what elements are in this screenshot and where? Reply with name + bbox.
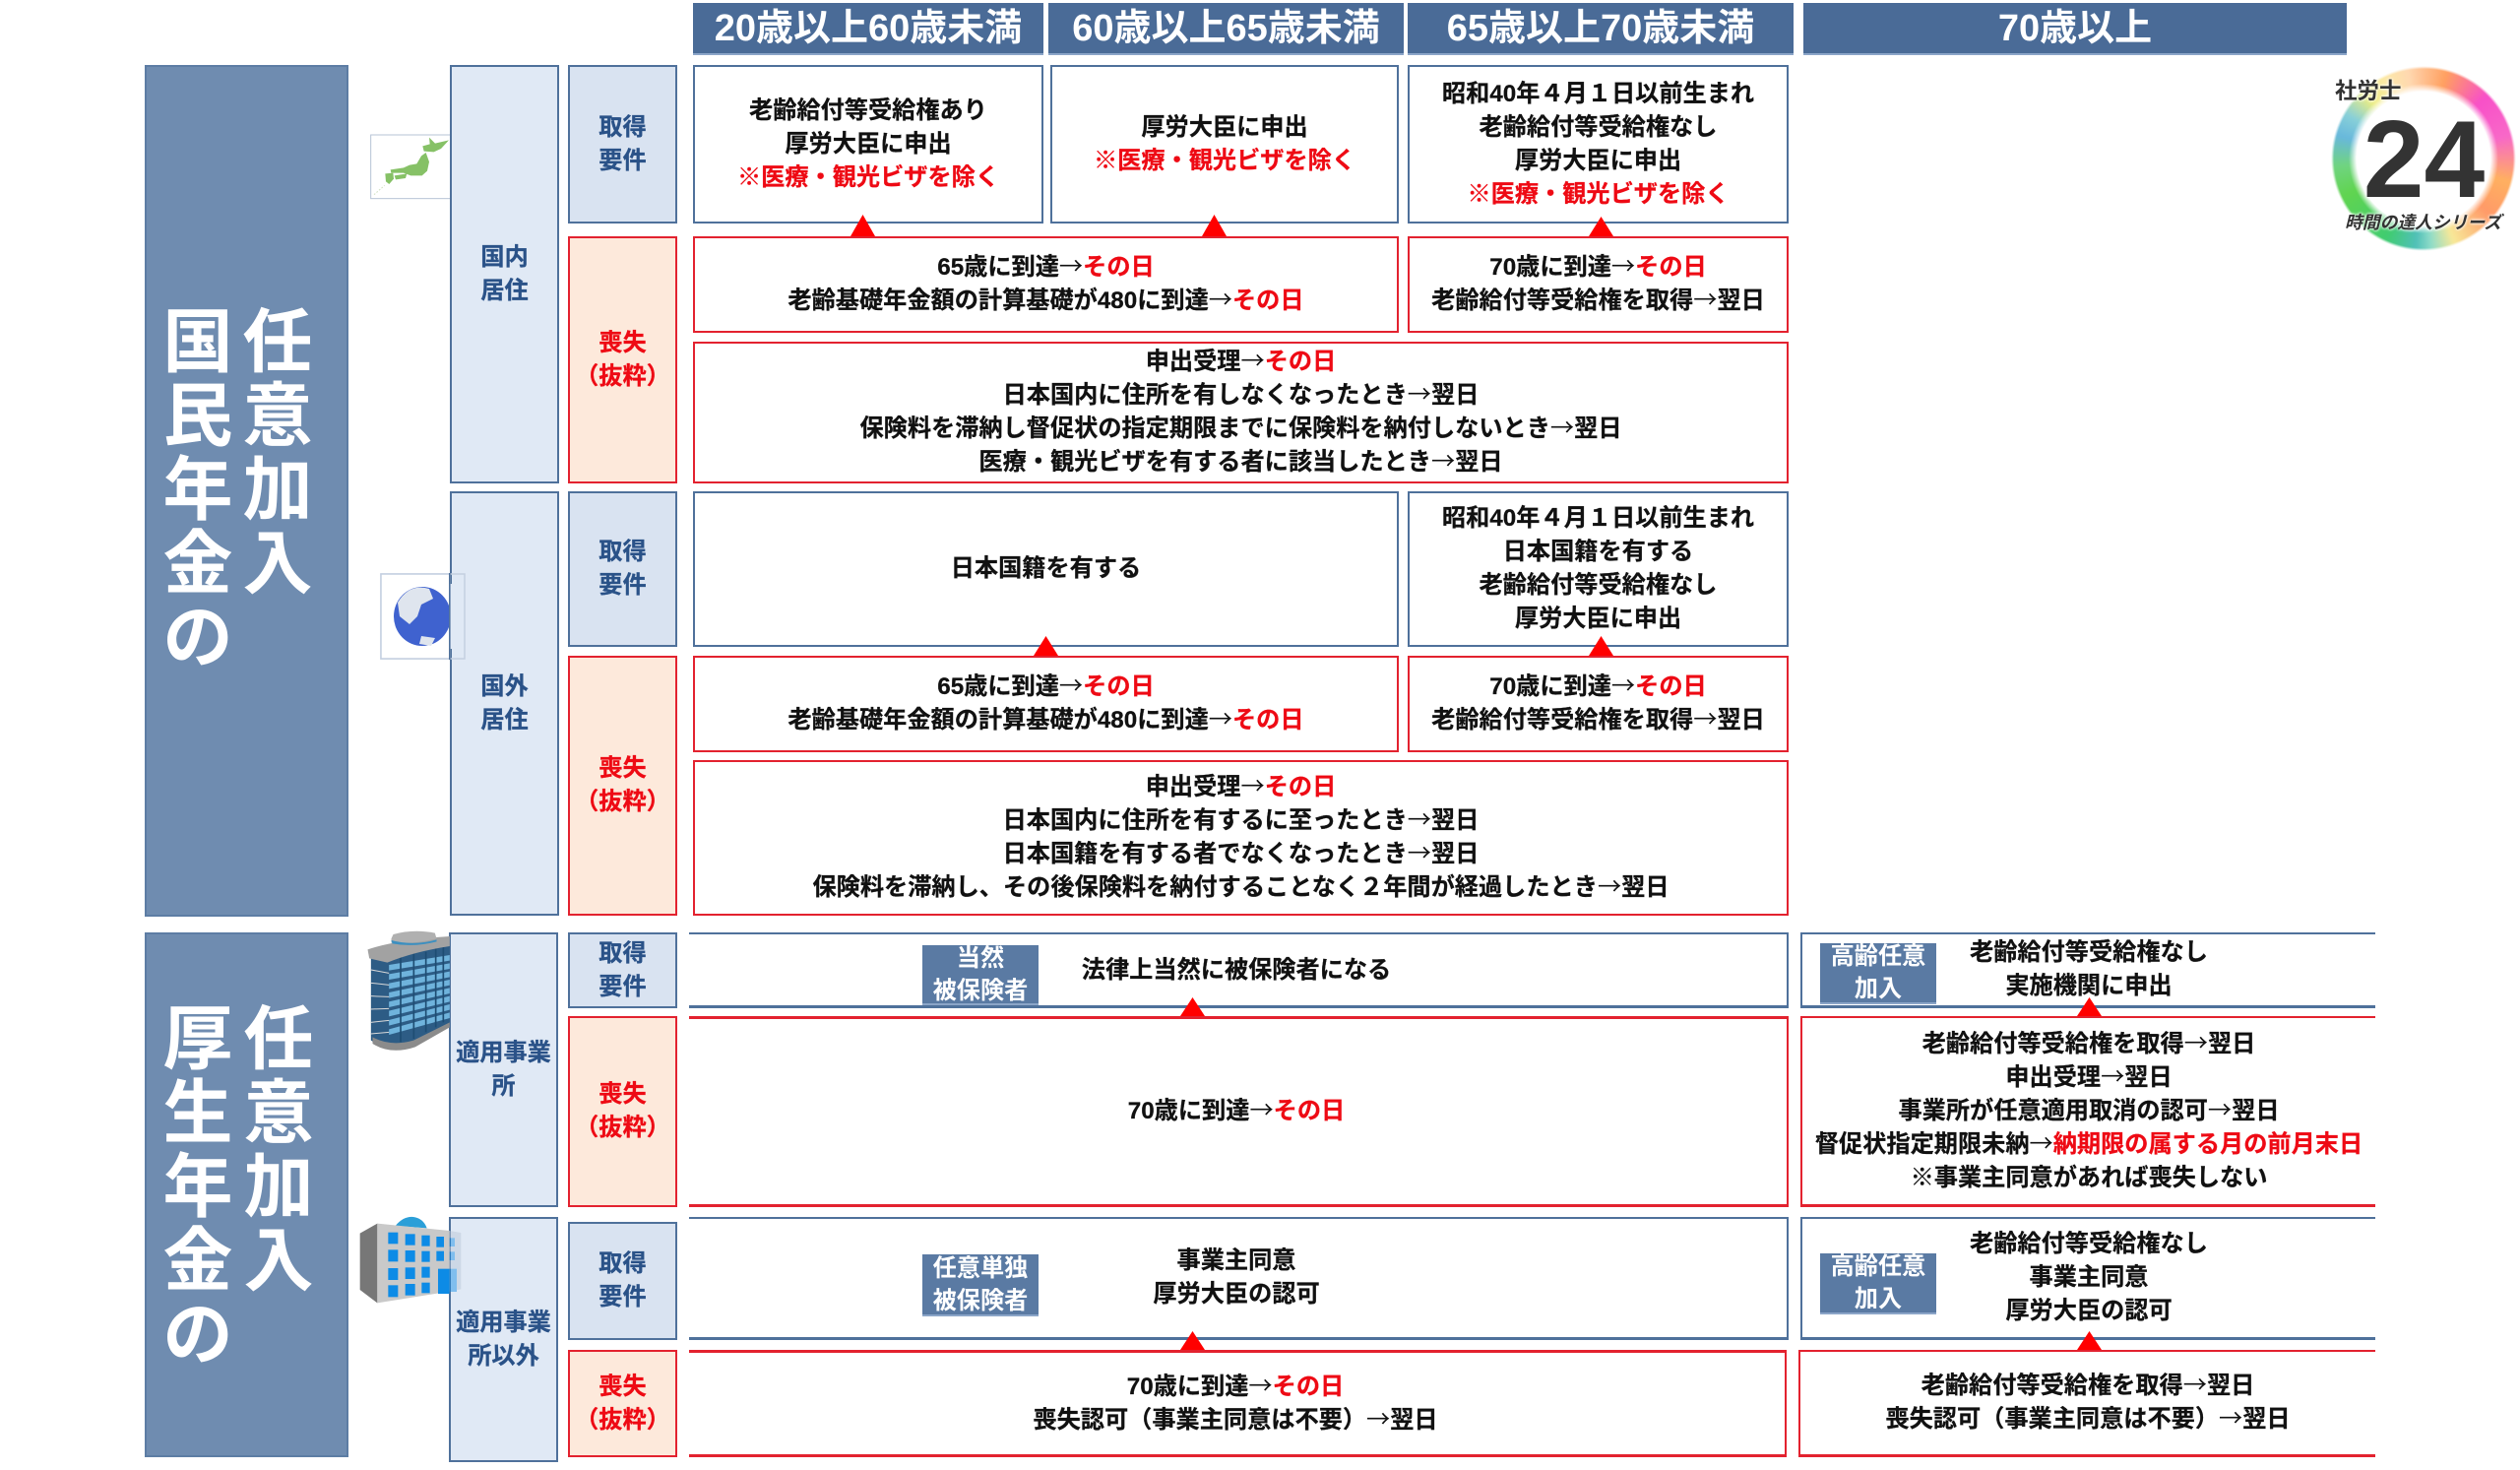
box: 高齢任意 loss: 老齢給付等受給権を取得→翌日 [1922, 1366, 2254, 1400]
box: 65-70 acquisition: ※医療・観光ビザを除く [1467, 181, 1730, 207]
panel: 国外居住: 国外 [480, 673, 529, 699]
box: 60-65 acquisition [1050, 65, 1399, 224]
panel: 適用事業所: 適用事業 [456, 1040, 551, 1065]
box: loss at 65: 65歳に到達→その日 [937, 247, 1155, 282]
panel: 適用事業所以外 [449, 1217, 558, 1462]
box: 65-70 acquisition: 厚労大臣に申出 [1515, 148, 1681, 173]
box: 高齢任意加入 適用事業所 [1800, 932, 2375, 1008]
title column right: 意 [242, 378, 313, 456]
panel: 適用事業所 [449, 932, 558, 1207]
label: 喪失 (国外) [568, 656, 677, 916]
box: overseas loss at 70 [1408, 656, 1789, 752]
box: overseas loss reasons [693, 760, 1789, 916]
panel: 国内居住 [450, 65, 559, 483]
tag: 高齢任意加入 [1820, 1253, 1936, 1314]
title column left: 厚 [162, 1001, 232, 1079]
tag: 当然被保険者: 当然 [957, 945, 1004, 971]
header: 20歳以上60歳未満: 20歳以上60歳未満 [715, 8, 1022, 49]
box: loss at 65: 老齢基礎年金額の計算基礎が480に到達→その日 [788, 281, 1304, 315]
panel: 国外居住 [450, 491, 559, 916]
box: domestic loss reasons: 保険料を滞納し督促状の指定期限までに保険料を納付しないとき→翌日 [859, 409, 1622, 443]
arrow: 60-65 [1202, 215, 1227, 236]
title column left [162, 304, 232, 677]
title column right: 加 [243, 1149, 313, 1227]
title column left: 国 [162, 304, 232, 382]
text: 実施機関申出 [1970, 939, 2208, 999]
panel: 国内居住: 居住 [480, 278, 529, 303]
label: 取得要件 (適用事業所以外): 取得 [598, 1250, 647, 1277]
box: 高齢任意 loss reasons [1800, 1016, 2375, 1207]
panel: 適用事業所以外: 適用事業 [456, 1310, 551, 1335]
title column right [242, 304, 313, 604]
box: 高齢任意 loss: 喪失認可（事業主同意は不要）→翌日 [1885, 1399, 2291, 1434]
label: 取得要件 (適用事業所以外): 要件 [598, 1284, 647, 1310]
label: 喪失 (適用事業所) [568, 1016, 677, 1207]
label: 取得要件 (適用事業所): 取得 [598, 939, 647, 967]
title column left: 生 [162, 1075, 232, 1153]
panel: 適用事業所: 所 [491, 1073, 516, 1099]
header: 70歳以上: 70歳以上 [1998, 8, 2152, 49]
title column left [162, 1001, 232, 1374]
row: 任意単独被保険者 [689, 1217, 1789, 1340]
box: domestic loss reasons [693, 342, 1789, 483]
label: 喪失 (適用事業所以外) [568, 1350, 677, 1457]
panel: 国外居住: 居住 [480, 707, 529, 733]
tag: 高齢任意加入: 加入 [1855, 1286, 1902, 1312]
tag: 任意単独被保険者: 被保険者 [933, 1288, 1028, 1313]
row: 70歳到達 loss [689, 1016, 1789, 1207]
box: domestic loss reasons: 日本国内に住所を有しなくなったとき→翌日 [1003, 375, 1479, 410]
box: 60-65 acquisition: 厚労大臣に申出 [1141, 114, 1308, 140]
box: overseas 65-70 acquisition [1408, 491, 1789, 647]
box: 高齢任意 loss reasons: 事業所が任意適用取消の認可→翌日 [1898, 1091, 2280, 1124]
arrow: 高齢任意 lower row [2077, 1331, 2102, 1350]
box: 高齢任意 loss reasons: ※事業主同意があれば喪失しない [1911, 1164, 2267, 1191]
box: 20-60 acquisition: ※医療・観光ビザを除く [737, 163, 999, 191]
arrow: overseas 65-70 [1589, 636, 1613, 656]
box: loss at 65 [693, 236, 1399, 333]
title column left: 年 [162, 452, 232, 530]
text: 事業主同意・認可: 事業主同意 [2030, 1264, 2148, 1291]
box: domestic loss reasons: 医療・観光ビザを有する者に該当したとき→翌日 [978, 442, 1503, 477]
title column right: 加 [242, 452, 313, 530]
label: 取得要件 (国外): 取得 [598, 539, 647, 565]
panel: 適用事業所以外: 所以外 [468, 1343, 539, 1369]
label: 取得要件 (適用事業所) [568, 932, 677, 1008]
box: 高齢任意 loss reasons: 申出受理→翌日 [2005, 1057, 2173, 1091]
label: 取得要件 (国内): 要件 [598, 148, 647, 173]
logo number 24: 24 [2363, 98, 2485, 221]
row: 当然被保険者 [689, 932, 1789, 1008]
panel: 国民年金の任意加入 title [145, 65, 348, 917]
title column right: 入 [242, 526, 313, 604]
box: 65-70 acquisition: 老齢給付等受給権なし [1480, 114, 1717, 140]
title column left: 金 [162, 1223, 232, 1301]
text: 事業主同意・認可 [1970, 1231, 2208, 1324]
title column right [243, 1001, 313, 1301]
tag: 高齢任意加入: 高齢任意 [1831, 943, 1925, 970]
text: 実施機関申出: 実施機関に申出 [2005, 973, 2173, 999]
icon: Japan map [370, 134, 450, 199]
label: 取得要件 (国外) [568, 491, 677, 647]
box: overseas loss reasons: 日本国内に住所を有するに至ったとき→翌日 [1003, 800, 1479, 835]
row: 70歳到達 loss: 70歳に到達→その日 [1128, 1091, 1345, 1125]
icon: globe [380, 573, 466, 660]
text: 実施機関申出: 老齢給付等受給権なし [1970, 939, 2208, 966]
label: 取得要件 (国内) [568, 65, 677, 224]
label: 喪失 (国内): （抜粋） [575, 362, 670, 390]
tag: 高齢任意加入 [1820, 943, 1936, 1004]
box: loss at 70 [1408, 236, 1789, 333]
tag: 当然被保険者 [922, 945, 1039, 1005]
title column right: 任 [242, 304, 313, 382]
arrow: 20-60 [850, 215, 875, 236]
label: 取得要件 (適用事業所): 要件 [598, 973, 647, 1000]
box: 20-60 acquisition: 厚労大臣に申出 [785, 130, 952, 158]
title column right: 任 [243, 1001, 313, 1079]
box: overseas loss at 65: 老齢基礎年金額の計算基礎が480に到達→その日 [788, 700, 1304, 735]
box: overseas 65-70 acquisition: 老齢給付等受給権なし [1480, 572, 1717, 599]
header: 65歳以上70歳未満 [1408, 3, 1794, 55]
panel: 厚生年金の任意加入 title [145, 932, 348, 1457]
box: overseas loss reasons: 申出受理→その日 [1146, 767, 1336, 801]
header: 60歳以上65歳未満 [1048, 3, 1404, 55]
label: 喪失 (国外): （抜粋） [575, 789, 670, 815]
box: overseas loss reasons: 日本国籍を有する者でなくなったとき→翌日 [1003, 834, 1479, 868]
text: 事業主同意: 事業主同意 [1177, 1247, 1295, 1274]
logo label 社労士: 社労士 [2335, 79, 2402, 103]
box: loss at 70: 老齢給付等受給権を取得→翌日 [1431, 281, 1765, 315]
box: overseas 65-70 acquisition: 厚労大臣に申出 [1515, 606, 1681, 632]
text: 事業主同意・認可: 老齢給付等受給権なし [1970, 1231, 2208, 1257]
header: 60歳以上65歳未満: 60歳以上65歳未満 [1072, 8, 1380, 49]
arrow: 65-70 [1589, 217, 1613, 236]
box: overseas nationality [693, 491, 1399, 647]
box: overseas loss at 65: 65歳に到達→その日 [937, 667, 1155, 701]
title column right: 意 [243, 1075, 313, 1153]
arrow: overseas under 65 [1034, 636, 1058, 656]
header: 65歳以上70歳未満: 65歳以上70歳未満 [1447, 8, 1754, 49]
box: loss at 70: 70歳に到達→その日 [1489, 247, 1707, 282]
title column left: 民 [162, 378, 232, 456]
title column left: の [162, 1297, 232, 1374]
label: 取得要件 (国内): 取得 [598, 114, 647, 140]
logo: 社労士24 時間の達人シリーズ [2331, 67, 2516, 250]
label: 喪失 (国内): 喪失 [598, 329, 647, 356]
box: 65-70 acquisition [1408, 65, 1789, 224]
arrow: 高齢任意 row [2077, 997, 2102, 1016]
box: 20-60 acquisition: 老齢給付等受給権あり [749, 96, 987, 124]
label: 取得要件 (国外): 要件 [598, 572, 647, 599]
box: overseas 65-70 acquisition: 日本国籍を有する [1503, 539, 1693, 565]
title column right: 入 [243, 1223, 313, 1301]
row: 任意単独 loss [689, 1350, 1787, 1457]
label: 喪失 (適用事業所以外): （抜粋） [575, 1406, 670, 1434]
text: 事業主同意 [1153, 1246, 1320, 1308]
tag: 任意単独被保険者 [922, 1254, 1039, 1316]
text: 事業主同意・認可: 厚労大臣の認可 [2005, 1298, 2173, 1324]
title column left: 金 [162, 526, 232, 604]
row: 任意単独 loss: 70歳に到達→その日 [1127, 1367, 1344, 1400]
box: 高齢任意 loss reasons: 督促状指定期限未納→納期限の属する月の前月末日 [1815, 1124, 2362, 1158]
box: 65-70 acquisition: 昭和40年４月１日以前生まれ [1442, 81, 1754, 106]
arrow: 任意単独 row [1180, 1331, 1205, 1350]
box: overseas loss reasons: 保険料を滞納し、その後保険料を納付することなく２年間が経過したとき→翌日 [812, 867, 1670, 902]
tag: 任意単独被保険者: 任意単独 [933, 1254, 1028, 1282]
tag: 高齢任意加入: 加入 [1855, 976, 1902, 1002]
box: overseas loss at 70: 老齢給付等受給権を取得→翌日 [1431, 700, 1765, 735]
tag: 高齢任意加入: 高齢任意 [1831, 1253, 1925, 1280]
label: 取得要件 (適用事業所以外) [568, 1222, 677, 1340]
box: overseas loss at 70: 70歳に到達→その日 [1489, 667, 1707, 701]
tag: 当然被保険者: 被保険者 [933, 977, 1028, 1004]
text: 法律上当然に被保険者になる: 法律上当然に被保険者になる [1082, 957, 1391, 984]
icon: office tower [368, 931, 450, 1051]
box: 高齢任意 loss reasons: 老齢給付等受給権を取得→翌日 [1922, 1024, 2255, 1057]
label: 喪失 (適用事業所): 喪失 [598, 1081, 647, 1108]
header: 20歳以上60歳未満 [693, 3, 1043, 55]
box: 60-65 acquisition: ※医療・観光ビザを除く [1094, 148, 1355, 173]
label: 喪失 (国外): 喪失 [598, 755, 647, 782]
title column left: 年 [162, 1149, 232, 1227]
label: 喪失 (適用事業所以外): 喪失 [598, 1373, 647, 1400]
box: 高齢任意加入 適用事業所以外 [1800, 1217, 2375, 1340]
box: 20-60 acquisition [693, 65, 1043, 224]
title column left: の [162, 600, 232, 677]
box: overseas loss at 65 [693, 656, 1399, 752]
box: domestic loss reasons: 申出受理→その日 [1146, 342, 1336, 376]
box: overseas nationality: 日本国籍を有する [951, 555, 1141, 582]
box: 高齢任意 loss [1798, 1350, 2375, 1457]
logo colour ring [2331, 66, 2516, 251]
logo series name: 時間の達人シリーズ [2345, 213, 2501, 232]
panel: 国内居住: 国内 [480, 244, 529, 270]
label: 喪失 (適用事業所): （抜粋） [575, 1115, 670, 1141]
label: 喪失 (国内) [568, 236, 677, 483]
arrow: 当然 row [1180, 997, 1205, 1016]
icon: office building [360, 1217, 461, 1304]
text: 事業主同意: 厚労大臣の認可 [1153, 1281, 1320, 1308]
row: 任意単独 loss: 喪失認可（事業主同意は不要）→翌日 [1033, 1400, 1438, 1434]
box: overseas 65-70 acquisition: 昭和40年４月１日以前生まれ [1442, 505, 1754, 532]
header: 70歳以上 [1803, 3, 2347, 55]
